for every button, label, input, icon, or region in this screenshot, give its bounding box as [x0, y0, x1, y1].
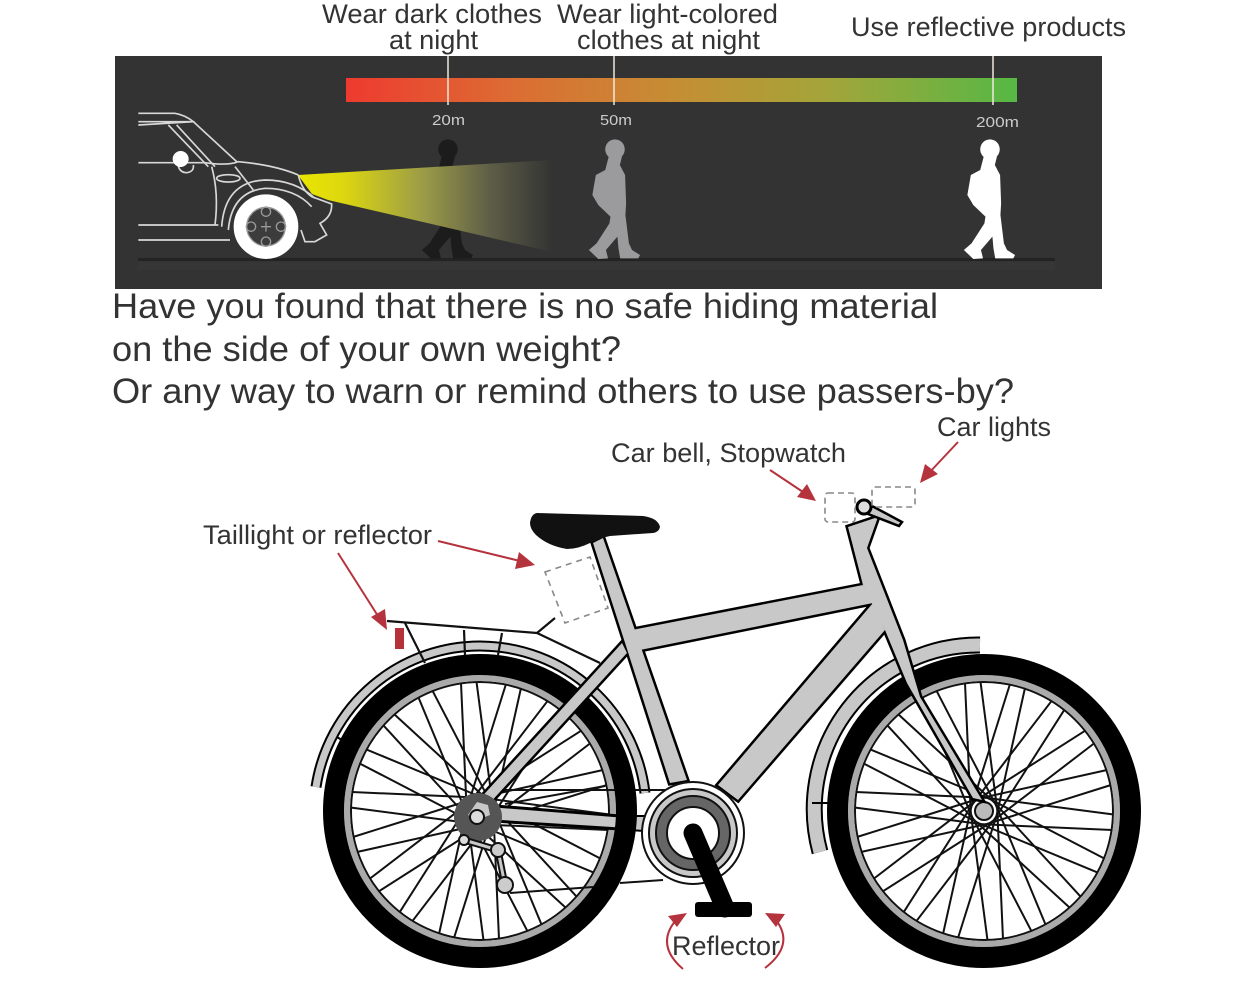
label: taillight or reflector: Taillight or reflector [203, 520, 432, 550]
panel: night visibility distance [115, 56, 1102, 289]
rear fender [316, 646, 645, 793]
heading: wear dark clothes [322, 0, 542, 55]
saddle [530, 513, 660, 549]
red rear reflector [395, 628, 404, 649]
gradient distance bar [346, 78, 1017, 102]
arrow: to saddle bag area [438, 541, 535, 569]
text block: question paragraph: Or any way to warn or remind others to use passers-by? [112, 372, 1014, 411]
text block: question paragraph: Have you found that there is no safe hiding material [112, 287, 938, 326]
arrow: to lights box [920, 442, 958, 483]
distance tick: 50m: 50m [600, 113, 632, 129]
heading: wear light-colored clothes [557, 0, 778, 55]
rear cargo rack [387, 618, 600, 663]
heading: wear dark clothes: at night [389, 25, 478, 55]
label: car bell, stopwatch: Car bell, Stopwatch [611, 438, 846, 468]
arrow: to bell box [770, 470, 816, 501]
arrow: right pedal reflector [765, 913, 785, 968]
chainring and crank [642, 782, 752, 917]
arrow: left pedal reflector [667, 913, 687, 969]
front wheel [830, 632, 1157, 958]
rear hub and derailleur [454, 793, 513, 893]
dashed placement box: bell and stopwatch [825, 493, 855, 522]
heading: use reflective products: Use reflective products [851, 12, 1126, 42]
distance tick: 20m: 20m [432, 113, 465, 129]
headlight beam [298, 160, 552, 252]
road [138, 258, 1055, 270]
car outline [138, 113, 332, 253]
label: pedal reflector: Reflector [672, 931, 780, 961]
front fender [812, 645, 980, 852]
handlebar [857, 500, 902, 526]
bicycle frame [477, 517, 982, 805]
chain and chain stay [477, 786, 670, 893]
pedestrian in dark clothes [422, 139, 473, 259]
bicycle illustration [316, 500, 1157, 958]
dashed placement box: car lights [872, 487, 915, 507]
rear wheel [326, 632, 653, 958]
distance tick: 20m [432, 56, 465, 129]
heading: wear light-colored clothes: clothes at night [577, 25, 760, 55]
pedestrian in light-colored clothes [589, 139, 640, 259]
text block: question paragraph: on the side of your own weight? [112, 330, 621, 369]
distance tick: 50m [600, 56, 632, 129]
label: car lights: Car lights [937, 412, 1051, 442]
distance tick: 200m [976, 56, 1019, 131]
text block: question paragraph [112, 287, 1014, 411]
rear tire [334, 664, 626, 958]
arrow: to rear reflector [338, 553, 387, 630]
distance tick: 200m: 200m [976, 115, 1019, 131]
pedestrian with reflective products [964, 139, 1015, 259]
dashed placement box: saddle bag [545, 557, 608, 623]
